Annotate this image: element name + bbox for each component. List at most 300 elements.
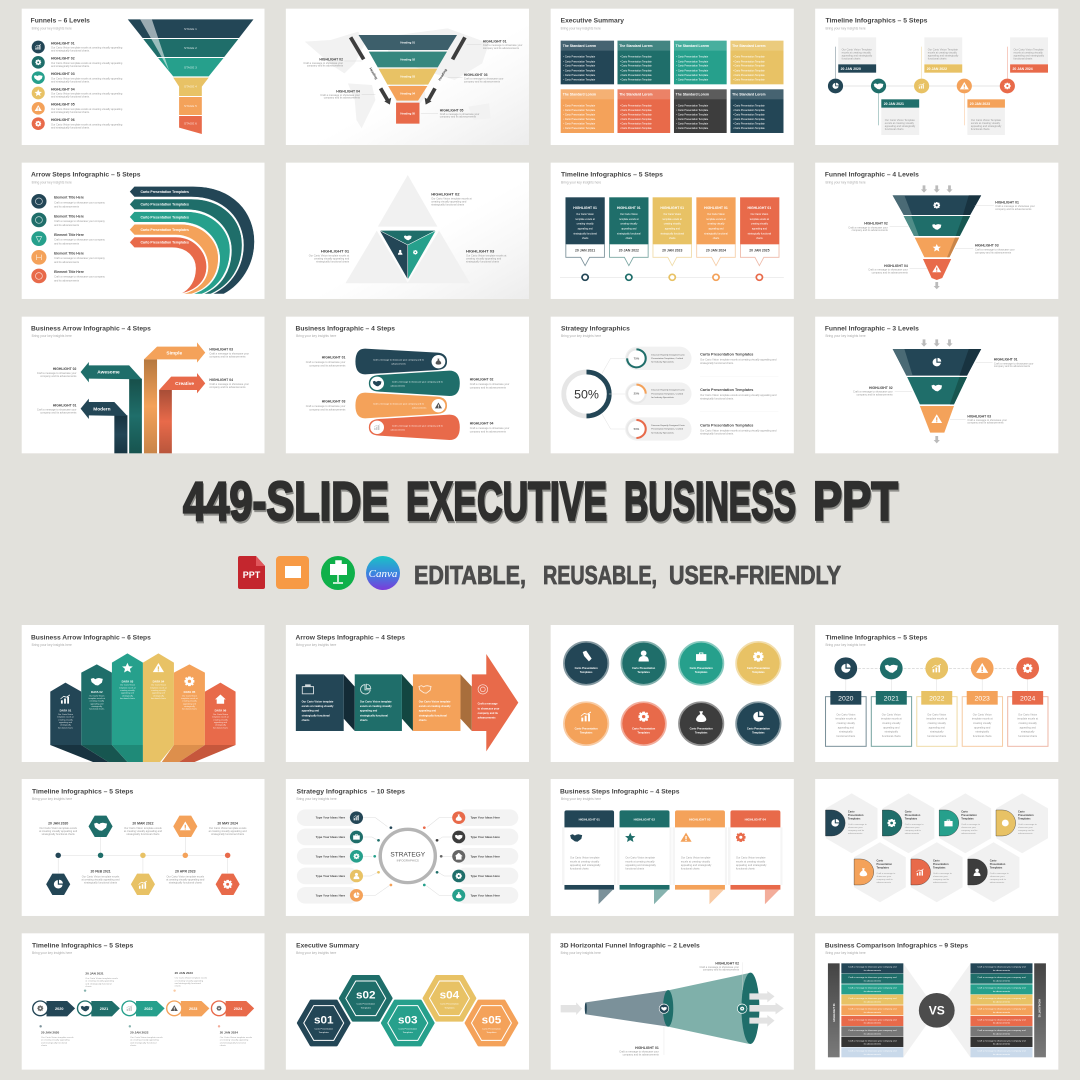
funnel graphic: [561, 973, 784, 1044]
cards: 20 JAN 2023: [662, 249, 682, 253]
arrow timeline: charts: [85, 985, 92, 988]
callouts: Craft a message to showcase your: [303, 62, 343, 65]
arrow timeline: 2022: [144, 1007, 153, 1011]
step cards: HIGHLIGHT 04: [745, 817, 766, 821]
step cards: functional charts: [625, 868, 645, 871]
step cards: appealing and strategically: [681, 864, 712, 867]
card grid: • Carto Presentation Template: [563, 60, 596, 63]
funnel: [893, 339, 981, 443]
callouts: company and its advancements: [40, 375, 77, 378]
folded arrow: appealing and: [419, 710, 437, 713]
card grid: • Carto Presentation Template: [620, 109, 652, 112]
callouts: company and its advancements: [995, 208, 1032, 211]
cards: charts: [713, 237, 720, 240]
columns: functional charts: [151, 697, 166, 700]
timeline: strategically functional charts: [84, 881, 118, 884]
step cards: HIGHLIGHT 03: [689, 817, 711, 821]
50 percent donut: [564, 372, 609, 416]
timeline: [39, 816, 247, 895]
VS badge: [919, 993, 955, 1028]
hexagon tiles: Craft a message to: [848, 823, 867, 826]
timeline: template excels at: [926, 718, 947, 721]
card grid: [561, 41, 783, 133]
columns: strategically: [91, 705, 102, 708]
right column: its advancements: [993, 990, 1011, 993]
hexagon chain: Carto Presentation: [314, 1027, 334, 1030]
element list: Element Title Here: [54, 233, 84, 237]
subheading: Bring your key insights here: [32, 643, 72, 647]
heading: Timeline Infographics – 5 Steps: [32, 942, 134, 949]
panel: timeline years: [815, 625, 1058, 762]
columns: strategically: [122, 694, 133, 697]
callouts: Craft a message to showcase your: [37, 408, 77, 411]
timeline: appealing and: [929, 726, 945, 729]
callouts: Craft a message to showcase your: [853, 391, 893, 394]
card grid: • Carto Presentation Template: [563, 104, 596, 107]
hexagon tiles: showcase your: [876, 875, 892, 878]
center ring: STRATEGY: [390, 852, 426, 859]
callouts: HIGHLIGHT 02: [431, 191, 460, 196]
folded arrow: appealing and: [360, 710, 378, 713]
arrow timeline: 2023: [189, 1007, 197, 1011]
heading: Arrow Steps Infographic – 5 Steps: [31, 172, 141, 179]
element list: and its advancements: [54, 280, 80, 283]
funnel levels: Heading 04: [400, 92, 416, 96]
cards: appealing and: [665, 228, 680, 231]
hexagon tiles: Craft a message to: [990, 872, 1009, 875]
legend list: Our Carto Vision template excels at creating visually appealing: [51, 47, 123, 50]
legend list: and strategically functional charts.: [51, 126, 90, 129]
callouts: Our Carto Vision template excels at: [466, 255, 507, 258]
columns: DATA 02: [91, 690, 103, 694]
timeline: Our Carto Vision Template: [1014, 48, 1044, 51]
columns: functional charts: [120, 697, 135, 700]
left column: its advancements: [864, 979, 882, 982]
cards: strategically functional: [573, 232, 597, 235]
bent arrows: Simple: [166, 350, 183, 356]
brush circles: Templates: [752, 671, 765, 674]
callouts: company and its advancements: [852, 229, 889, 232]
legend list: [32, 41, 123, 130]
ribbons: advancements: [391, 428, 406, 431]
funnel chart: STAGE 5: [184, 104, 197, 108]
left column: HIGHLIGHT 01: [832, 1003, 836, 1022]
callouts: creating visually appealing and: [466, 257, 502, 260]
timeline: appealing and strategically: [971, 125, 1002, 128]
legend list: HIGHLIGHT 03: [51, 72, 75, 76]
heading: Timeline Infographics – 5 Steps: [826, 18, 928, 25]
hexagon tiles: company and its: [848, 829, 865, 832]
arrow timeline: at creating visually appealing: [220, 1039, 249, 1042]
right text blocks: strategically functional charts.: [700, 362, 734, 365]
timeline: strategically functional charts: [169, 881, 203, 884]
left column: Craft a message to showcase your company and: [848, 987, 897, 990]
hexagon tiles: advancements: [905, 832, 920, 835]
panel: executive summary hexagons: [286, 933, 529, 1070]
idea pills: Type Your Ideas Here: [316, 816, 345, 820]
cards: template excels at: [663, 218, 682, 221]
panel: strategy 10 steps: [286, 779, 529, 916]
hexagon tiles: Craft a message to: [876, 872, 896, 875]
timeline: appealing and strategically: [885, 125, 916, 128]
hexagon chain: s01: [314, 1014, 334, 1026]
legend list: and strategically functional charts.: [51, 80, 90, 83]
callouts: HIGHLIGHT 02: [864, 222, 888, 226]
callouts: HIGHLIGHT 04: [884, 264, 908, 268]
callouts: Craft a message to showcase your: [209, 383, 249, 386]
folded arrow: strategically functional: [302, 714, 330, 717]
idea pills: Type Your Ideas Here: [316, 835, 345, 839]
callouts: HIGHLIGHT 01: [321, 248, 350, 253]
timeline: Our Carto Vision template excels: [39, 827, 78, 830]
VS backdrop: [903, 963, 970, 1057]
panel: funnel 3 levels: [815, 317, 1058, 453]
heading: Executive Summary: [296, 942, 360, 949]
columns: Our Carto Vision: [151, 684, 166, 687]
hexagon tiles: Carto: [961, 810, 968, 813]
card grid: • Carto Presentation Template: [733, 56, 765, 59]
hexagon tiles: Carto: [876, 859, 884, 862]
hexagon tiles: Carto: [905, 810, 912, 813]
hexagon tiles: Carto: [933, 859, 940, 862]
left column: its advancements: [864, 1043, 882, 1046]
brush circles: Templates: [637, 731, 651, 734]
progress pills: Presentation Templates, Crafted: [651, 357, 684, 360]
hexagon tiles: advancements: [1018, 832, 1033, 835]
timeline: 2022: [929, 695, 945, 702]
cards: 20 JAN 2024: [706, 249, 726, 253]
right text blocks: strategically functional charts.: [700, 433, 734, 436]
callouts: Craft a message to showcase your: [470, 383, 510, 386]
card grid: • Carto Presentation Template: [676, 78, 709, 81]
bent arrows: Creative: [175, 381, 194, 387]
subheading: Bring your key insights here: [561, 181, 601, 185]
arrow timeline: and strategically functional: [130, 1041, 157, 1044]
columns: Our Carto Vision: [58, 713, 73, 716]
card grid: The Standard Lorem: [676, 93, 709, 97]
timeline: appealing and: [883, 726, 900, 729]
element list: Element Title Here: [54, 214, 84, 218]
card grid: • Carto Presentation Template: [733, 104, 765, 107]
cards: template excels at: [575, 218, 595, 221]
callouts: company and its advancements: [324, 97, 361, 100]
baseline with rings: [560, 274, 784, 280]
panel: strategy infographics 50 percent: [551, 317, 794, 453]
arrows into funnel: Heading: [438, 68, 448, 81]
timeline: 20 FEB 2021: [90, 869, 111, 873]
hexagon tiles: showcase your: [1018, 826, 1033, 829]
hexagon tiles: Craft a message to: [961, 823, 981, 826]
progress pills: for Industry Specialists.: [651, 361, 675, 364]
hexagon tiles: Templates: [848, 818, 861, 821]
subheading: Bring your key insights here: [296, 334, 337, 338]
columns: functional charts: [213, 726, 228, 729]
columns: template excels at: [119, 686, 136, 689]
timeline: strategically: [839, 731, 853, 734]
card grid: • Carto Presentation Template: [676, 56, 709, 59]
card grid: • Carto Presentation Template: [563, 113, 596, 116]
subheading: Bring your key insights here: [826, 951, 866, 955]
subheading: Bring your key insights here: [296, 643, 337, 647]
callouts: Craft a message to showcase your: [440, 113, 480, 116]
callouts: company and its advancements: [483, 47, 520, 50]
callouts: company and its advancements: [994, 365, 1031, 368]
legend list: Our Carto Vision template excels at creating visually appealing: [51, 93, 123, 96]
columns: Our Carto Vision: [182, 694, 197, 697]
hexagon tiles: showcase your: [848, 826, 863, 829]
element list: Craft a message to showcase your company: [54, 276, 106, 279]
columns: creating visually: [89, 700, 104, 703]
main title: PPT: [813, 470, 898, 532]
timeline: at creating visually appealing and: [39, 830, 78, 833]
callouts: company and its advancements: [623, 1054, 660, 1057]
cards: [565, 197, 779, 266]
timeline: functional charts: [882, 735, 901, 738]
arrow timeline: charts: [220, 1044, 227, 1047]
card grid: The Standard Lorem: [563, 44, 596, 48]
funnel levels: [359, 35, 457, 124]
hexagon tiles: showcase your: [933, 875, 948, 878]
subheading: Bring your key insights here: [826, 26, 866, 30]
callouts: HIGHLIGHT 04: [470, 422, 494, 426]
funnel levels: Heading 01: [400, 41, 416, 45]
card grid: • Carto Presentation Template: [733, 69, 765, 72]
timeline: 2023: [975, 695, 990, 702]
heading: Strategy Infographics – 10 Steps: [297, 788, 405, 795]
left column: Craft a message to showcase your company and: [848, 1050, 897, 1053]
panel: arrow steps 5: [22, 163, 264, 299]
columns: appealing and: [214, 722, 227, 724]
card grid: • Carto Presentation Template: [563, 56, 596, 59]
brush circles: Carto Presentation: [632, 667, 656, 670]
columns: strategically: [184, 705, 195, 708]
card grid: • Carto Presentation Template: [676, 104, 709, 107]
hexagon chain: s05: [482, 1014, 502, 1026]
callouts: HIGHLIGHT 01: [53, 403, 77, 407]
columns: DATA 05: [184, 690, 196, 694]
card grid: • Carto Presentation Template: [733, 123, 765, 126]
right text blocks: Our Carto Vision template excels at creating visually appealing and: [700, 429, 777, 432]
card grid: • Carto Presentation Template: [733, 109, 765, 112]
callouts: company and its advancements: [209, 355, 246, 358]
right column: Craft a message to showcase your company and: [977, 1039, 1026, 1042]
card grid: • Carto Presentation Template: [676, 109, 709, 112]
hexagon tiles: Templates: [905, 818, 918, 821]
subheading: Bring your key insights here: [297, 797, 337, 801]
left column: Craft a message to showcase your company and: [848, 1008, 897, 1011]
progress pills: [625, 347, 692, 441]
callouts: company and its advancements: [40, 411, 77, 414]
callouts: [306, 356, 510, 433]
arrow timeline: 20 JAN 2022: [130, 1030, 149, 1034]
folded arrow: charts: [302, 719, 310, 722]
card grid: • Carto Presentation Template: [676, 113, 709, 116]
card grid: • Carto Presentation Template: [620, 118, 652, 121]
element list: Craft a message to showcase your company: [54, 239, 106, 242]
timeline: functional charts: [928, 57, 947, 60]
legend list: HIGHLIGHT 02: [51, 57, 75, 61]
timeline: Our Carto Vision Template: [971, 119, 1002, 122]
timeline: creating visually: [973, 722, 992, 725]
callouts: Craft a message to showcase your: [975, 248, 1015, 251]
card grid: • Carto Presentation Template: [620, 60, 652, 63]
right column: its advancements: [993, 1053, 1011, 1056]
connectors: [602, 358, 626, 429]
callouts: Craft a message to showcase your: [306, 361, 346, 364]
card grid: • Carto Presentation Template: [620, 104, 652, 107]
ribbons: advancements: [412, 406, 427, 409]
step cards: Our Carto Vision template: [570, 857, 600, 860]
hexagon tiles: Craft a message to: [905, 823, 924, 826]
left column: Craft a message to showcase your company and: [848, 1029, 897, 1032]
tagline: EDITABLE,: [414, 560, 526, 590]
arrow timeline: Our Carto Vision template excels: [41, 1036, 74, 1039]
icon: Keynote: [321, 556, 355, 590]
element list: Craft a message to showcase your company: [54, 257, 106, 260]
brush circles: [564, 642, 780, 745]
element list: Craft a message to showcase your company: [54, 201, 106, 204]
right column: its advancements: [993, 979, 1011, 982]
callouts: HIGHLIGHT 02: [319, 57, 343, 61]
arrow timeline: 2021: [100, 1007, 108, 1011]
ribbons: advancements: [391, 384, 406, 387]
left column: its advancements: [864, 969, 882, 972]
heading: Business Arrow Infographic – 4 Steps: [31, 326, 151, 333]
brush circles: Templates: [580, 731, 593, 734]
card grid: The Standard Lorem: [563, 93, 596, 97]
timeline: appealing and: [838, 726, 855, 729]
funnel chart: STAGE 4: [184, 84, 197, 88]
center ring: [380, 829, 435, 883]
ribbons: Craft a message to showcase your company and its: [392, 424, 444, 427]
columns: template excels at: [89, 697, 105, 700]
hexagon tiles: showcase your: [905, 826, 920, 829]
callouts: [853, 358, 1034, 425]
left column: its advancements: [864, 1032, 882, 1035]
hexagon tiles: Templates: [933, 867, 946, 870]
heading: Business Arrow Infographic – 6 Steps: [31, 635, 151, 642]
timeline: 2020: [838, 695, 854, 702]
heading: Timeline Infographics – 5 Steps: [826, 635, 928, 642]
timeline: template excels at: [881, 718, 902, 721]
arrows into funnel: [351, 37, 465, 105]
timeline: creating visually: [882, 722, 901, 725]
arrow timeline: at creating visually appealing: [85, 980, 115, 983]
right column: its advancements: [993, 1043, 1011, 1046]
step cards: HIGHLIGHT 01: [579, 817, 600, 821]
hexagon chain: Templates: [444, 1006, 455, 1009]
cards: Our Carto Vision: [620, 213, 638, 216]
callouts: company and its advancements: [440, 116, 477, 119]
folded arrow: Our Carto Vision template: [302, 700, 334, 703]
left column: its advancements: [864, 1011, 882, 1014]
callouts: Craft a message to showcase your: [848, 226, 888, 229]
cards: HIGHLIGHT 01: [704, 206, 728, 210]
50 percent donut: 50%: [574, 388, 599, 402]
callouts: HIGHLIGHT 02: [869, 386, 893, 390]
timeline: 2024: [1020, 695, 1036, 702]
cards: creating visually: [577, 223, 594, 226]
card grid: • Carto Presentation Template: [733, 118, 765, 121]
columns: Our Carto Vision: [120, 684, 135, 687]
panel: timeline cards: [551, 163, 794, 299]
callouts: Craft a message to showcase your: [483, 44, 523, 47]
callouts: company and its advancements: [309, 408, 346, 411]
panel: arrow steps 4: [286, 625, 529, 762]
timeline: strategically: [930, 731, 944, 734]
arrow timeline: 20 JAN 2020: [41, 1030, 60, 1034]
right text blocks: strategically functional charts.: [700, 397, 734, 400]
right column: its advancements: [993, 1011, 1011, 1014]
callouts: HIGHLIGHT 01: [322, 356, 346, 360]
timeline: 20 JAN 2021: [884, 102, 904, 106]
element list: Element Title Here: [54, 251, 84, 255]
subheading: Bring your key insights here: [561, 951, 601, 955]
right column: Craft a message to showcase your company and: [977, 966, 1026, 969]
idea pills: Type Your Ideas Here: [316, 854, 345, 858]
callouts: company and its advancements: [703, 969, 740, 972]
columns: strategically: [215, 724, 226, 727]
cards: HIGHLIGHT 01: [748, 206, 771, 210]
timeline: functional charts: [1018, 735, 1038, 738]
subheading: Bring your key insights here: [561, 797, 601, 801]
step cards: excels at creating visually: [570, 860, 600, 863]
timeline: 20 JAN 2022: [927, 67, 947, 71]
timeline: functional charts: [885, 128, 904, 131]
card grid: • Carto Presentation Template: [620, 113, 652, 116]
columns: creating visually: [213, 718, 228, 721]
timeline: strategically functional charts: [42, 833, 75, 836]
folded arrow: advancements: [478, 717, 496, 720]
app icons row: [238, 556, 400, 590]
right text blocks: Our Carto Vision template excels at creating visually appealing and: [700, 394, 777, 397]
idea pills: [297, 809, 518, 904]
columns: DATA 04: [153, 679, 165, 683]
funnel chart: [128, 19, 253, 134]
legend list: HIGHLIGHT 06: [51, 118, 75, 122]
folded arrow: excels at creating visually: [360, 705, 392, 708]
timeline: 20 JAN 2023: [970, 102, 990, 106]
columns: creating visually: [151, 689, 166, 692]
legend list: Our Carto Vision template excels at creating visually appealing: [51, 62, 123, 65]
arrow timeline: Our Carto Vision template excels: [130, 1036, 164, 1039]
callouts: Craft a message to showcase your: [868, 269, 908, 272]
subheading: Bring your key insights here: [32, 951, 72, 955]
left column: its advancements: [864, 1000, 882, 1003]
hexagon chain: Templates: [486, 1031, 497, 1034]
card grid: • Carto Presentation Template: [676, 118, 709, 121]
folded arrow: excels at creating visually: [419, 705, 451, 708]
panel: executive summary cards: [551, 9, 794, 145]
progress pills: Discover Expertly Designed Carto: [651, 353, 685, 356]
arrows into funnel: Heading: [368, 67, 379, 80]
timeline: creating visually: [1019, 722, 1038, 725]
right column: Craft a message to showcase your company and: [977, 1050, 1026, 1053]
folded arrow: Our Carto Vision template: [360, 700, 392, 703]
idea pills: Type Your Ideas Here: [470, 874, 500, 878]
arrow timeline: charts: [41, 1044, 48, 1047]
main title: EXECUTIVE: [406, 470, 607, 532]
hexagon chain: Carto Presentation: [482, 1027, 502, 1030]
heading: Timeline Infographics – 5 Steps: [32, 788, 134, 795]
columns: creating visually: [182, 700, 197, 703]
panel: timeline hexagons: [22, 779, 264, 916]
hexagon tiles: Presentation: [1018, 814, 1034, 817]
timeline: 2021: [884, 695, 899, 702]
timeline: excels at creating visually: [928, 51, 958, 54]
panel: business arrow 4 steps: [22, 317, 264, 453]
arrow timeline: Our Carto Vision template excels: [220, 1036, 253, 1039]
